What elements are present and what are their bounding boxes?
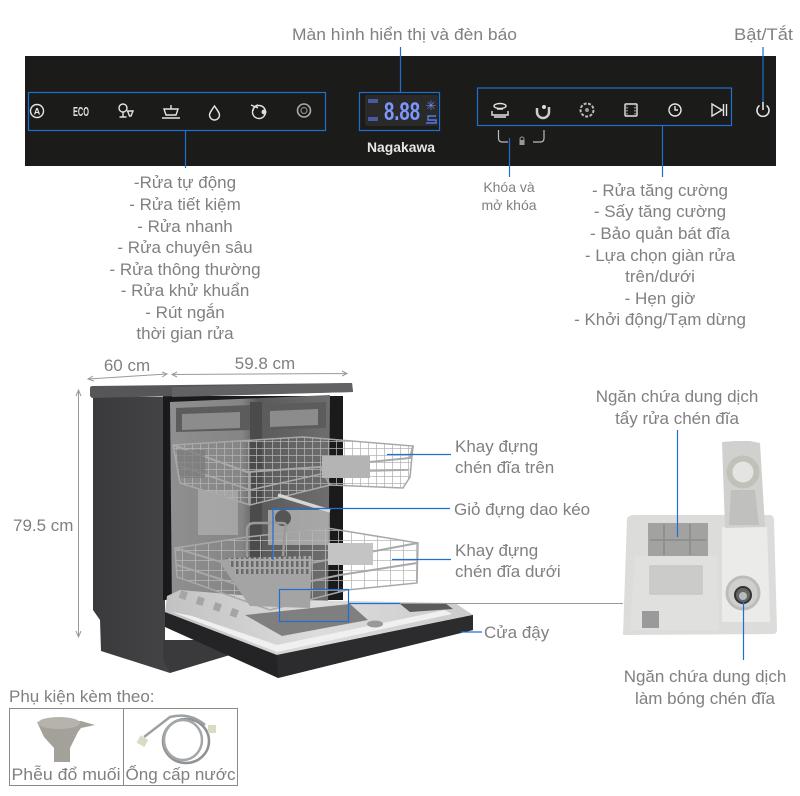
dispenser illustration [623,441,777,635]
label: lock and unlock [481,179,537,213]
label: salt funnel: Phễu đổ muối [12,765,120,784]
text block: left program list: - Rửa thông thường [109,260,261,279]
icon: extra wash [492,104,508,117]
label: door: Cửa đậy [484,623,550,642]
panel background [25,56,776,166]
icon: intensive wash [162,105,180,118]
side panel [93,397,170,673]
label: lower rack [455,541,561,581]
text block: right function list: trên/dưới [625,267,695,286]
text block: left program list: thời gian rửa [136,324,234,343]
upper rack [173,437,413,505]
icon: sanitize [251,105,266,118]
label: cutlery basket: Giỏ đựng dao kéo [454,500,590,519]
door front panel [165,612,473,678]
spray arm [278,495,330,511]
label: lock and unlock: mở khóa [481,197,537,213]
heading: display and indicator lights: Màn hình hiển thị và đèn báo [292,25,517,44]
icon: power [757,102,769,116]
text block: right function list: - Bảo quản bát đĩa [590,224,730,243]
inner tub [170,395,330,610]
lower rack [175,528,418,610]
dimension: width 59.8 cm [172,354,347,377]
rack wheels [180,594,246,617]
icon: start pause [712,104,726,116]
icon: auto wash [30,104,44,118]
icon: normal wash [210,106,220,120]
icon: shorten time [298,104,310,117]
LCD display [365,95,438,126]
rinse aid panel [722,527,770,622]
label: lock and unlock: Khóa và [483,179,535,195]
text block: left program list [109,173,261,343]
accessories table [10,708,238,786]
rinse knob [727,577,759,609]
label: detergent compartment [596,387,758,428]
label: lower rack: chén đĩa dưới [455,562,561,581]
dimension: height 79.5 cm: 79.5 cm [13,516,73,535]
icon: rack selection [625,104,637,116]
label: rinse aid compartment: Ngăn chứa dung dịch [624,667,786,686]
icon: lock brackets [498,130,544,145]
lid button [642,611,659,628]
text block: left program list: - Rửa nhanh [137,217,233,236]
door latch [367,620,383,628]
dimension: depth 60 cm [88,356,167,381]
text block: left program list: - Rửa tiết kiệm [129,195,241,214]
text block: right function list [574,181,746,329]
front frame [163,396,343,600]
table frame [10,708,238,786]
brand logo: Nagakawa [367,139,435,155]
top cover [90,383,353,398]
callout lines: control panel [28,47,763,177]
icon: auto wash: A [34,106,41,116]
label: upper rack: chén đĩa trên [455,458,554,477]
heading: included accessories: Phụ kiện kèm theo: [9,687,155,706]
text block: right function list: - Lựa chọn giàn rửa [585,246,736,265]
dishwasher illustration [90,383,473,678]
detergent lid [630,556,719,630]
icon: extra dry [537,105,549,118]
dimension: depth 60 cm: 60 cm [104,356,150,375]
label: detergent compartment: tẩy rửa chén đĩa [615,409,739,428]
flap ring [730,458,756,486]
icon: eco wash: ECO [73,104,89,119]
text block: left program list: - Rửa khử khuẩn [121,281,249,300]
text block: right function list: - Rửa tăng cường [592,181,728,200]
label: detergent compartment: Ngăn chứa dung dịch [596,387,758,406]
label: water hose: Ống cấp nước [126,764,236,784]
dimension: height 79.5 cm [13,390,81,637]
icon: salt funnel [37,717,95,762]
dispenser body [623,515,777,635]
icon: water hose [137,716,216,763]
door inner steel [165,590,473,655]
text block: left program list: - Rút ngắn [145,303,225,322]
callout lines: dishwasher parts [273,454,623,632]
LCD display: ✳ [426,98,437,113]
text block: left program list: -Rửa tự động [134,173,236,192]
detergent tub [648,523,708,556]
lid window [649,565,703,595]
cutlery basket [218,523,312,608]
label: rinse aid compartment: làm bóng chén đĩa [635,689,775,708]
callout lines: dispenser [678,430,744,660]
icon: dish storage [580,104,594,116]
text block: right function list: - Hẹn giờ [625,289,695,308]
icon: timer [669,104,681,116]
LCD display: 8.88 [384,98,420,126]
icon: quick wash [119,104,133,117]
label: lower rack: Khay đựng [455,541,538,560]
label: upper rack [455,437,554,477]
rinse flap [722,441,765,528]
label: rinse aid compartment [624,667,786,708]
text block: left program list: - Rửa chuyên sâu [117,238,253,257]
dimension: width 59.8 cm: 59.8 cm [235,354,295,373]
text block: right function list: - Sấy tăng cường [594,202,726,221]
text block: right function list: - Khởi động/Tạm dừng [574,310,746,329]
label: upper rack: Khay đựng [455,437,538,456]
heading: power button: Bật/Tắt [734,25,793,44]
base plinth [163,640,235,673]
control panel [25,56,776,166]
